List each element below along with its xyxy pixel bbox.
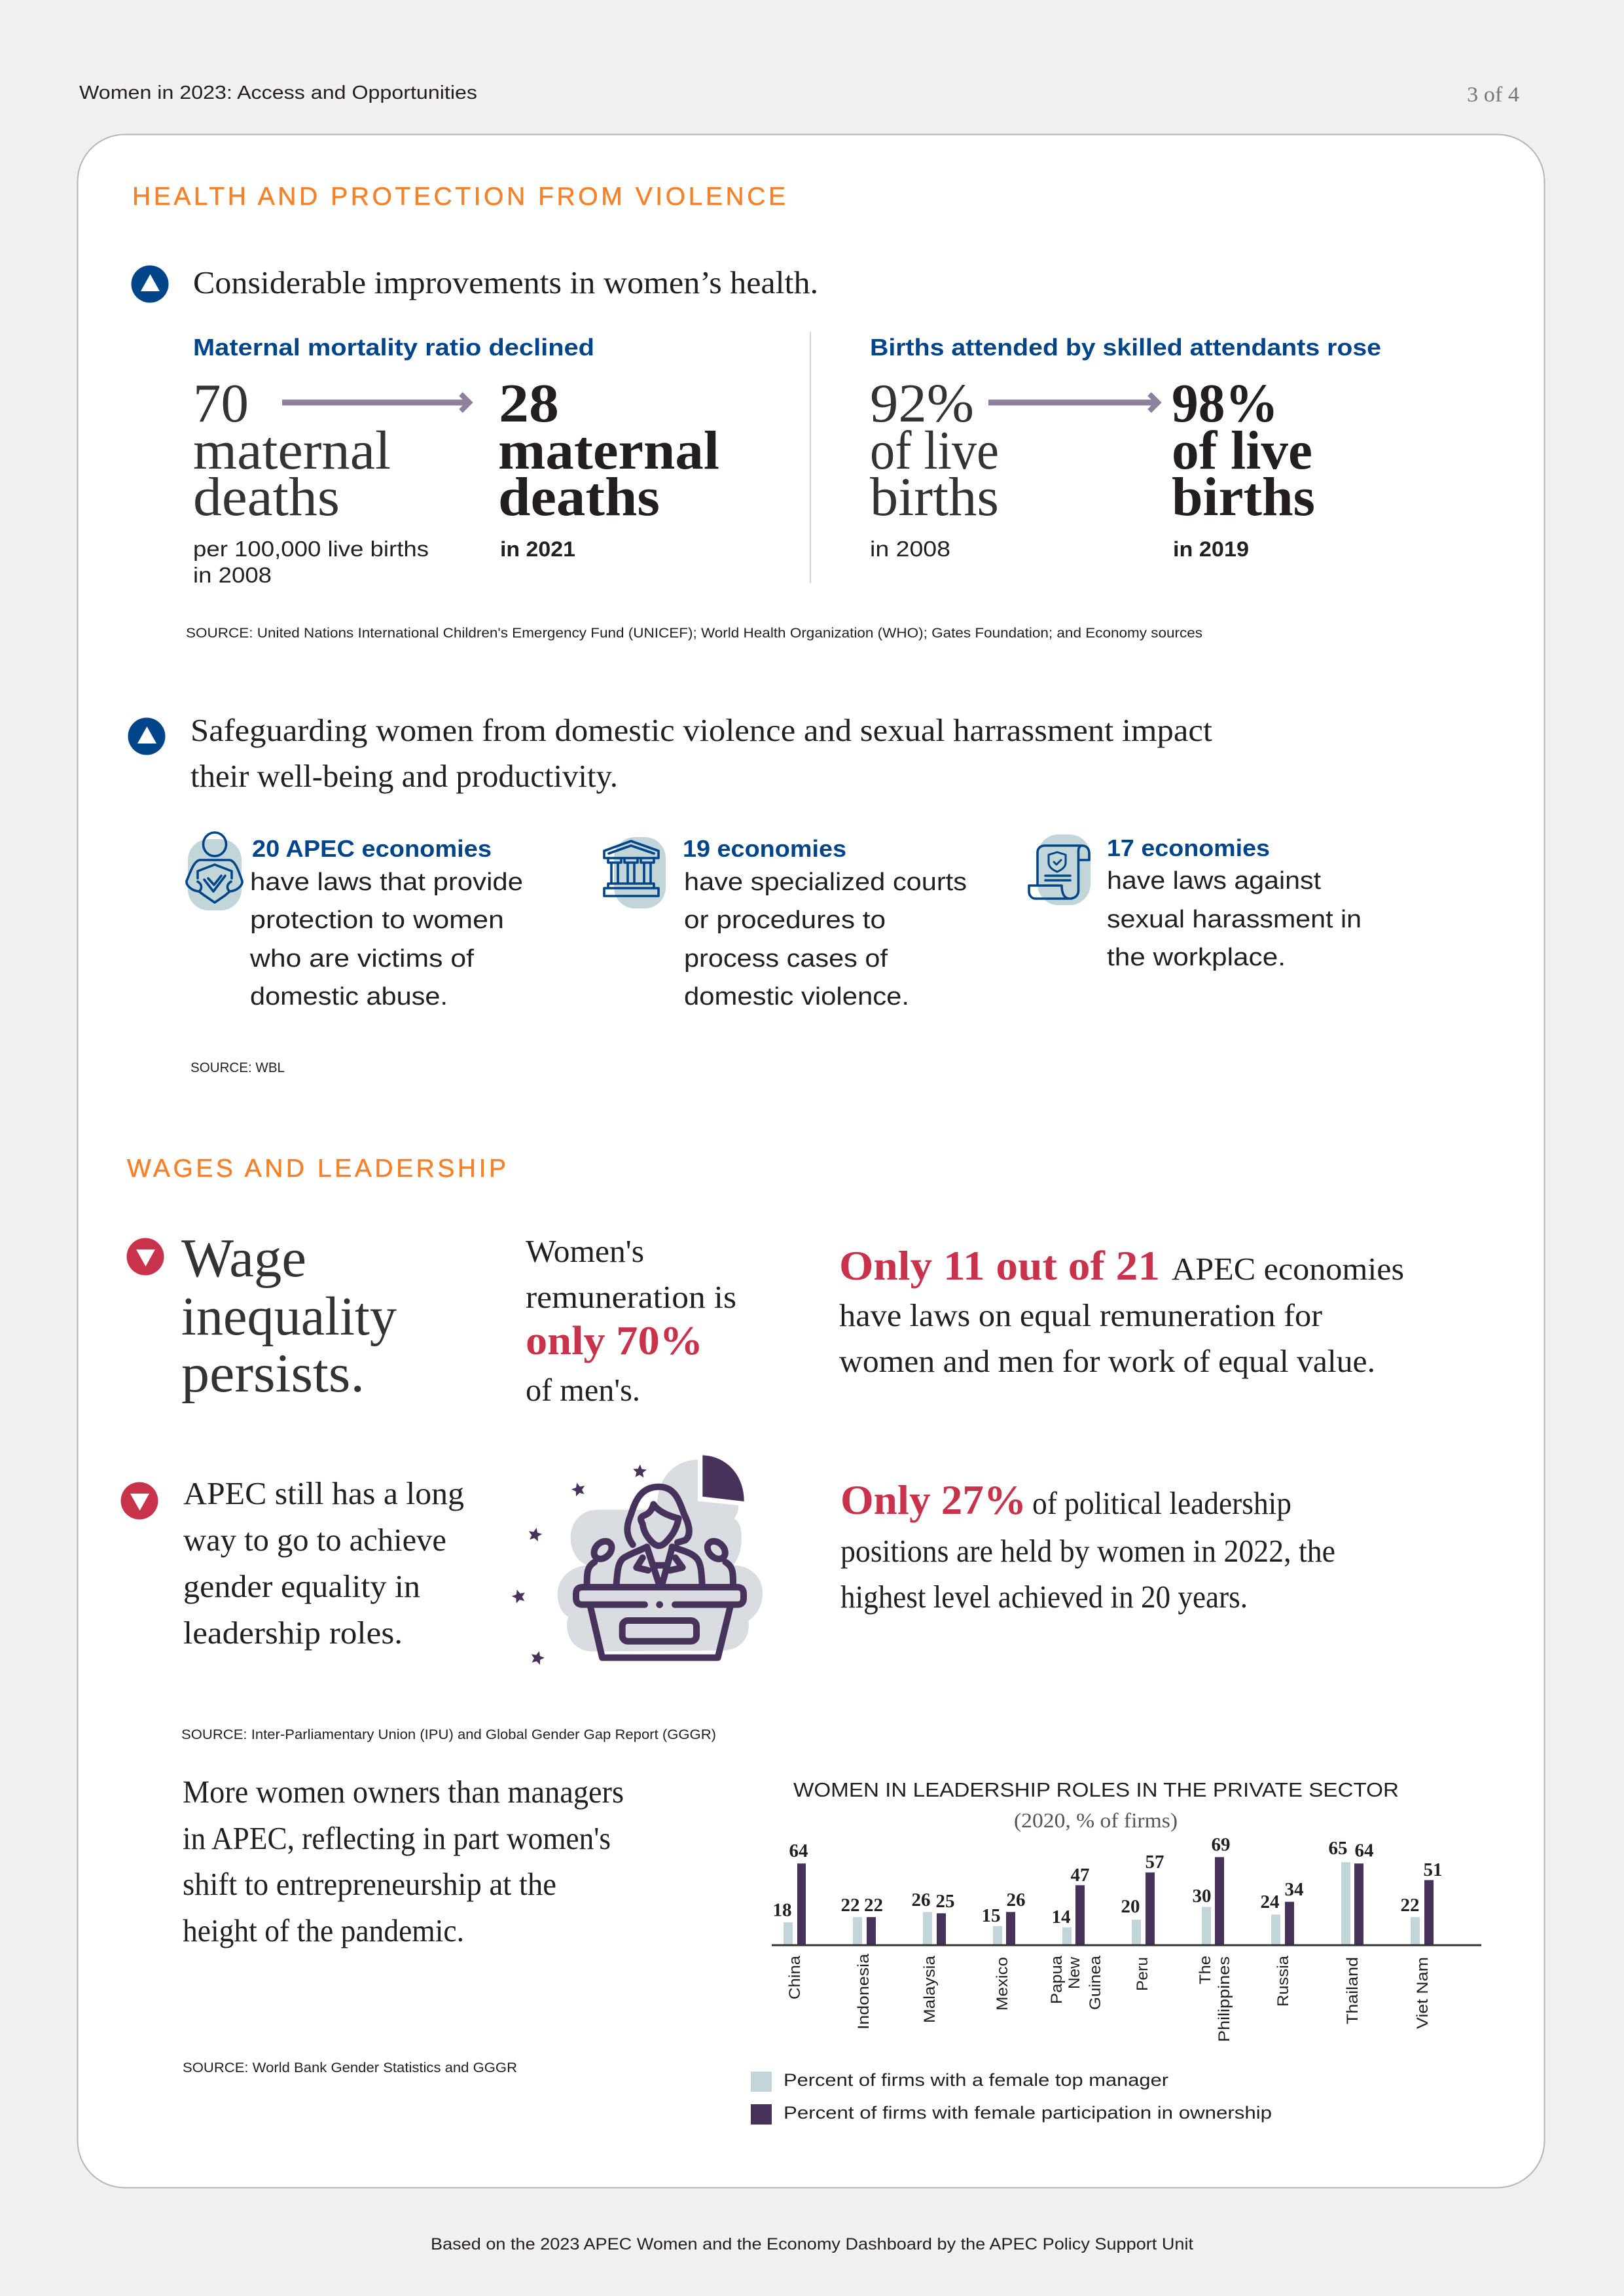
text: protection laws: protection to women xyxy=(250,906,504,934)
data labels: 26 xyxy=(911,1890,931,1910)
heading: health and protection: HEALTH AND PROTECTION FROM VIOLENCE xyxy=(132,183,785,211)
text: women owners: height of the pandemic. xyxy=(183,1912,464,1948)
data labels: 57 xyxy=(1146,1852,1164,1873)
text: gender equality in leadership: leadership roles. xyxy=(183,1615,403,1651)
data labels: 64 xyxy=(789,1840,808,1861)
data labels: 22 xyxy=(1401,1895,1419,1916)
axis labels: Mexico xyxy=(994,1957,1011,2011)
text: only 27 percent xyxy=(840,1477,1335,1615)
text: safeguarding: Safeguarding women from domestic violence and sexual harrassment impact xyxy=(190,712,1212,748)
data labels: 14 xyxy=(1051,1907,1071,1928)
data labels: 47 xyxy=(1071,1865,1089,1886)
text: 70 maternal deaths: maternal xyxy=(193,420,391,481)
text: specialized courts xyxy=(684,869,967,1011)
bars: female top manager xyxy=(784,1862,1420,1945)
text: wage inequality persists: Wage xyxy=(181,1228,306,1289)
text: 70 maternal deaths xyxy=(193,373,391,528)
text: only 27 percent: highest level achieved in 20 years. xyxy=(840,1579,1248,1615)
text: health improvements: Considerable improvements in women’s health. xyxy=(193,264,818,300)
text: only 11 out of 21: APEC economies xyxy=(1172,1251,1404,1287)
text: in 2021: in 2021 xyxy=(500,537,575,561)
block: 17 economies xyxy=(1029,834,1362,971)
block: maternal mortality xyxy=(193,334,719,587)
data labels: 20 xyxy=(1121,1896,1140,1917)
axis labels: New xyxy=(1066,1956,1083,1989)
text: safeguarding: their well-being and productivity. xyxy=(190,758,618,794)
arrow: maternal xyxy=(282,394,469,411)
axis labels: Papua xyxy=(1048,1955,1066,2004)
text: only 27 percent: of political leadership xyxy=(1032,1485,1291,1521)
heading: maternal mortality: Maternal mortality ratio declined xyxy=(193,334,594,361)
block: 19 economies xyxy=(604,835,967,1011)
footer: Based on the 2023 APEC Women and the Economy Dashboard by the APEC Policy Support Unit xyxy=(431,2235,1193,2253)
text: sexual harassment laws: sexual harassment in xyxy=(1107,906,1362,933)
text: only 70 percent: Women's xyxy=(526,1233,644,1269)
text: 28 maternal deaths: deaths xyxy=(498,467,660,528)
data labels: 25 xyxy=(936,1891,954,1912)
axis labels: Peru xyxy=(1134,1957,1151,1991)
text: protection laws xyxy=(249,869,523,1011)
text: gender equality in leadership: way to go to achieve xyxy=(183,1522,446,1558)
page number: 3 of 4 xyxy=(1467,83,1519,107)
icon: woman at podium xyxy=(511,1455,763,1666)
axis labels: Viet Nam xyxy=(1414,1957,1432,2029)
text: only 70 percent: of men's. xyxy=(526,1372,640,1408)
text: 28 maternal deaths: maternal xyxy=(498,420,719,481)
bars: female ownership xyxy=(797,1857,1434,1945)
text: in 2019: in 2019 xyxy=(1173,537,1249,561)
text: specialized courts: or procedures to xyxy=(684,906,886,934)
icon: up triangle health xyxy=(131,266,169,302)
source: WBL: SOURCE: WBL xyxy=(190,1060,285,1075)
text: 98% of live births: of live xyxy=(1172,420,1312,481)
source: World Bank: SOURCE: World Bank Gender Statistics and GGGR xyxy=(183,2060,517,2075)
axis labels: Thailand xyxy=(1344,1957,1362,2024)
text: only 11 out of 21: Only 11 out of 21 xyxy=(839,1242,1160,1289)
data labels: 30 xyxy=(1193,1886,1211,1907)
chart: women in leadership xyxy=(751,1778,1481,2125)
text: wage inequality persists xyxy=(181,1228,397,1404)
data labels: 24 xyxy=(1261,1892,1279,1912)
data labels: 65 xyxy=(1329,1838,1347,1859)
chart subtitle: (2020, % of firms) xyxy=(1014,1808,1178,1832)
text: only 70 percent: only 70% xyxy=(526,1319,703,1363)
text: 98% of live births: 98% xyxy=(1172,373,1278,434)
icon: protected person xyxy=(187,833,242,910)
text: wage inequality persists: persists. xyxy=(181,1343,365,1404)
text: women owners xyxy=(183,1774,624,1948)
axis labels: Philippines xyxy=(1216,1956,1233,2042)
text: 92% of live births xyxy=(870,373,999,528)
data labels: 22 xyxy=(840,1895,860,1916)
text: 70 maternal deaths: deaths xyxy=(193,467,340,528)
heading: skilled attendants: Births attended by skilled attendants rose xyxy=(870,334,1381,361)
text: 20 APEC economies: 20 APEC economies xyxy=(252,835,492,862)
icon: courthouse xyxy=(604,837,666,908)
text: 17 economies: 17 economies xyxy=(1107,834,1270,861)
text: sexual harassment laws: have laws against xyxy=(1107,867,1321,895)
data labels: 51 xyxy=(1423,1859,1443,1880)
text: only 11 out of 21: women and men for work of equal value. xyxy=(839,1343,1375,1379)
data labels: 64 xyxy=(1355,1840,1373,1861)
text: protection laws: have laws that provide xyxy=(250,869,523,896)
data labels xyxy=(772,1834,1443,1928)
text: wage inequality persists: inequality xyxy=(181,1286,397,1347)
text: 92% of live births: births xyxy=(870,467,999,528)
axis labels: China xyxy=(786,1955,804,2000)
text: safeguarding xyxy=(190,712,1212,794)
text: gender equality in leadership: gender equality in xyxy=(183,1568,420,1604)
text: women owners: in APEC, reflecting in part women's xyxy=(183,1820,611,1856)
axis labels: The xyxy=(1197,1956,1214,1984)
icon: legal scroll xyxy=(1029,834,1091,905)
text: only 27 percent: Only 27% xyxy=(840,1477,1026,1523)
text: in 2008: in 2008 xyxy=(870,537,950,561)
text: sexual harassment laws xyxy=(1107,867,1362,971)
text: gender equality in leadership xyxy=(183,1475,464,1651)
text: only 70 percent xyxy=(526,1233,736,1408)
text: per 100,000: per 100,000 live births xyxy=(193,537,429,561)
data labels: 26 xyxy=(1007,1890,1025,1910)
text: per 100,000 xyxy=(193,537,429,587)
text: 28 maternal deaths: 28 xyxy=(499,373,559,434)
text: 98% of live births: births xyxy=(1172,467,1315,528)
text: only 27 percent: positions are held by women in 2022, the xyxy=(840,1533,1335,1569)
legend: Percent of firms with a female top manager xyxy=(784,2070,1168,2090)
legend: Percent of firms with female participation in ownership xyxy=(784,2103,1272,2123)
block: 20 APEC economies xyxy=(187,833,523,1011)
data labels: 15 xyxy=(982,1905,1000,1926)
axis labels xyxy=(786,1953,1432,2042)
text: only 11 out of 21 xyxy=(839,1242,1404,1379)
chart title: WOMEN IN LEADERSHIP ROLES IN THE PRIVATE SECTOR xyxy=(793,1778,1399,1801)
source: health: SOURCE: United Nations International Children's Emergency Fund (UNICEF); World Health Organization (WHO); Gates Foundation; and Economy sources xyxy=(186,626,1202,641)
text: sexual harassment laws: the workplace. xyxy=(1107,944,1286,971)
text: specialized courts: process cases of xyxy=(684,945,888,973)
text: 28 maternal deaths xyxy=(498,373,719,528)
icon: down triangle leadership xyxy=(120,1482,158,1520)
axis labels: Russia xyxy=(1274,1955,1292,2007)
data labels: 18 xyxy=(772,1899,792,1920)
heading: wages and leadership: WAGES AND LEADERSHIP xyxy=(127,1155,506,1183)
icon: down triangle wage xyxy=(127,1238,164,1275)
axis labels: Indonesia xyxy=(855,1953,873,2030)
icon: up triangle safeguarding xyxy=(128,717,165,755)
text: 70 maternal deaths: 70 xyxy=(193,373,249,434)
text: per 100,000: in 2008 xyxy=(193,563,272,587)
text: only 70 percent: remuneration is xyxy=(526,1279,736,1315)
text: gender equality in leadership: APEC still has a long xyxy=(183,1475,464,1511)
text: 19 economies: 19 economies xyxy=(683,835,846,862)
header title: Women in 2023: Access and Opportunities xyxy=(79,82,477,103)
axis labels: Malaysia xyxy=(921,1955,939,2023)
axis labels: Guinea xyxy=(1087,1955,1104,2010)
text: protection laws: who are victims of xyxy=(249,945,474,973)
text: 92% of live births: of live xyxy=(870,420,999,481)
data labels: 69 xyxy=(1211,1834,1231,1855)
block: skilled attendants xyxy=(870,334,1381,561)
text: only 11 out of 21: have laws on equal remuneration for xyxy=(839,1297,1322,1333)
text: women owners: More women owners than managers xyxy=(183,1774,624,1810)
text: women owners: shift to entrepreneurship at the xyxy=(183,1866,556,1902)
text: specialized courts: domestic violence. xyxy=(684,983,909,1011)
legend xyxy=(751,2070,1272,2125)
data labels: 34 xyxy=(1284,1879,1304,1900)
source: IPU and GGGR: SOURCE: Inter-Parliamentary Union (IPU) and Global Gender Gap Report (GGGR) xyxy=(181,1727,716,1742)
text: specialized courts: have specialized courts xyxy=(684,869,967,896)
text: 98% of live births xyxy=(1172,373,1315,528)
data labels: 22 xyxy=(864,1895,883,1916)
arrow: births xyxy=(988,394,1158,411)
text: protection laws: domestic abuse. xyxy=(250,983,448,1011)
text: 92% of live births: 92% xyxy=(870,373,974,434)
